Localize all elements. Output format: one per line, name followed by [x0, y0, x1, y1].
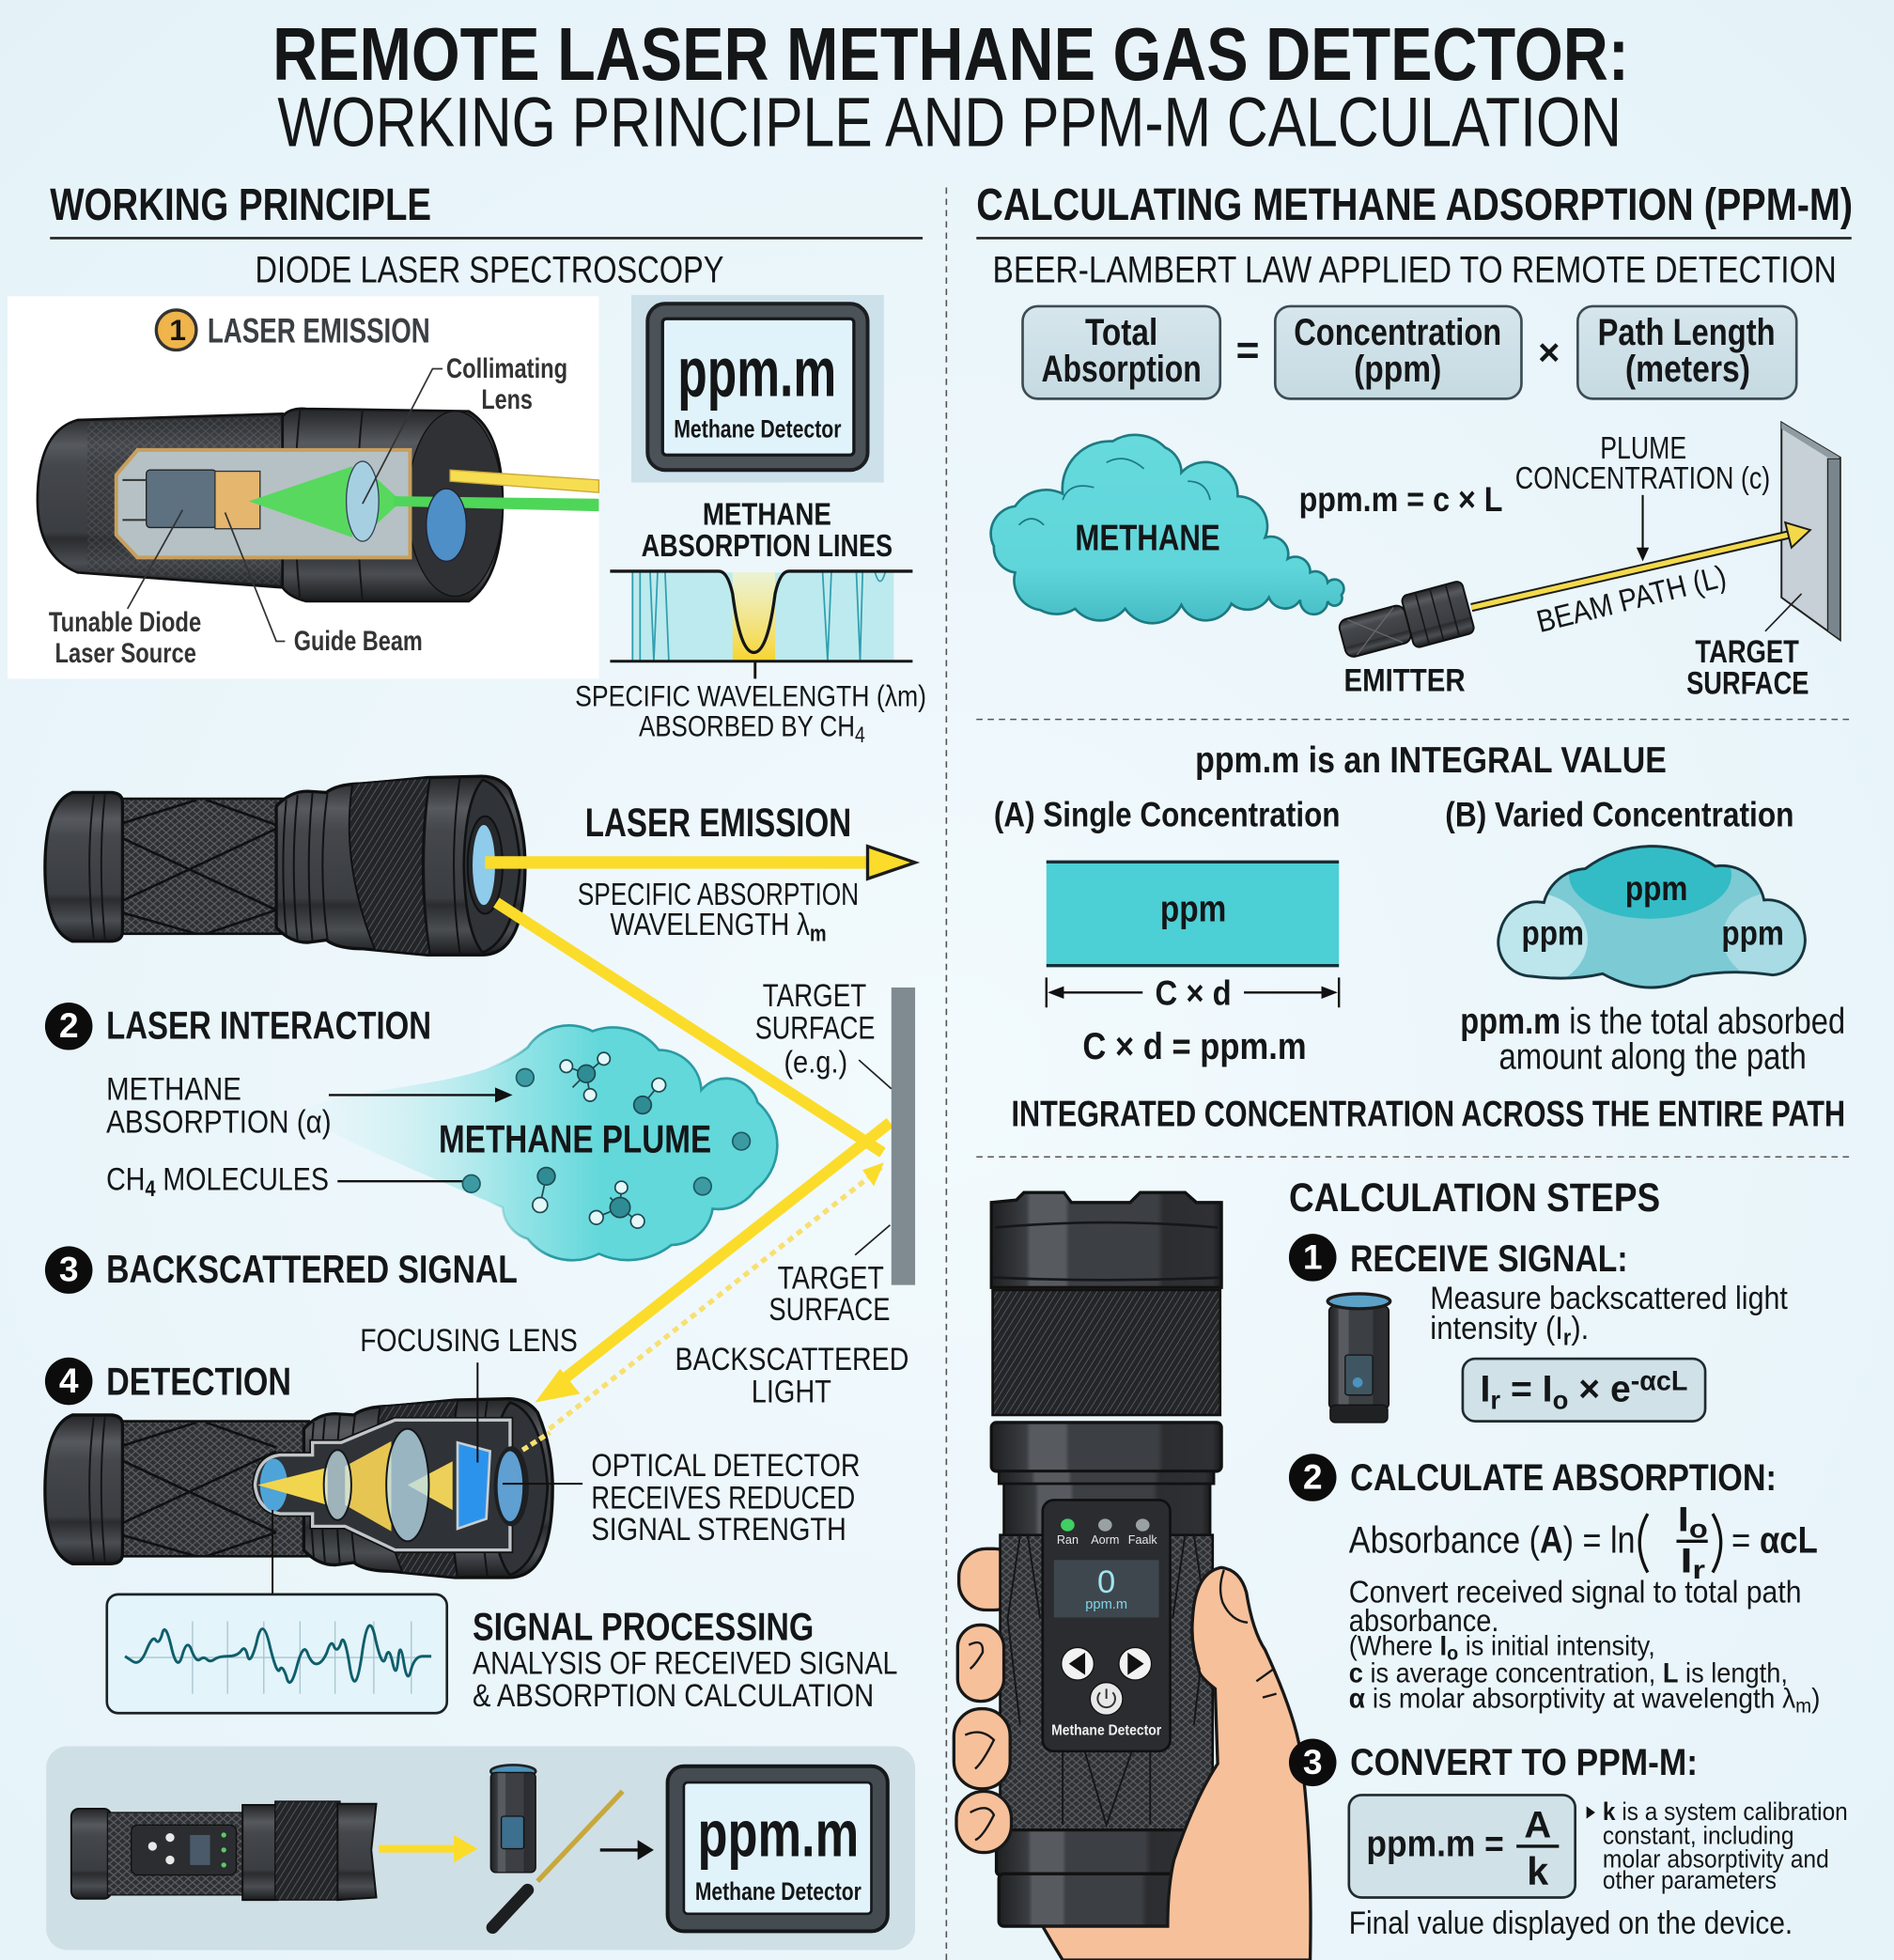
step 1: receive signal — [1289, 1234, 1788, 1423]
step 4: detection: 4 — [59, 1361, 79, 1400]
label: CH4 molecules: 4 — [145, 1176, 156, 1202]
panel: single concentration — [994, 794, 1341, 1067]
box: total absorption: Absorption — [1041, 349, 1202, 390]
step 3: convert to ppm-m: 3 — [1303, 1742, 1323, 1781]
heading: working principle: WORKING PRINCIPLE — [50, 180, 431, 230]
formula: o — [1689, 1514, 1708, 1543]
label: optical detector: OPTICAL DETECTOR — [591, 1448, 861, 1484]
label: laser emission: LASER EMISSION — [208, 311, 430, 350]
step 3: backscattered signal: BACKSCATTERED SIGNAL — [106, 1248, 518, 1291]
panel: ppm.m display: Methane Detector — [674, 415, 842, 443]
arrow: reflected beam — [536, 1123, 890, 1403]
icon: ppm.m display: Methane Detector — [695, 1877, 862, 1906]
formula: I — [1678, 1500, 1687, 1539]
step 2: laser interaction heading: 2 — [59, 1005, 79, 1045]
box: total absorption — [1023, 306, 1220, 398]
text: laser emission — [578, 801, 859, 947]
step 4: detection — [45, 1358, 291, 1405]
panel: laser emission cutaway — [8, 296, 598, 678]
text: signal processing: & ABSORPTION CALCULATION — [473, 1678, 874, 1714]
heading: working principle — [50, 180, 923, 291]
heading: integral value: ppm.m is an INTEGRAL VALUE — [1195, 740, 1667, 781]
box: total absorption: Total — [1085, 312, 1157, 353]
text: ppm.m explanation: ppm.m is the total absorbed — [1460, 1002, 1845, 1042]
formula box — [1463, 1359, 1705, 1422]
icon: flashlight emitter — [45, 776, 525, 955]
label: beam path: BEAM PATH (L) — [1533, 559, 1730, 640]
status LEDs: Faalk — [1128, 1533, 1157, 1547]
icon: step 1 badge — [156, 310, 196, 350]
panel: signal waveform — [107, 1510, 447, 1713]
panel: ppm.m display — [631, 295, 884, 483]
label: plume concentration: CONCENTRATION (c) — [1515, 461, 1770, 496]
step 1: receive signal: Measure backscattered light — [1430, 1281, 1788, 1316]
step 1: receive signal: RECEIVE SIGNAL: — [1350, 1238, 1628, 1280]
panel: single concentration: (A) Single Concentration — [994, 794, 1341, 833]
equation: total absorption: × — [1538, 332, 1560, 373]
step 1: receive signal: intensity (I — [1430, 1311, 1578, 1346]
icon: target surface slab — [1781, 423, 1840, 640]
label: backscattered light: LIGHT — [752, 1375, 831, 1410]
panel: output summary — [46, 1747, 915, 1950]
note: k constant — [1587, 1797, 1848, 1894]
arrow: beam to target — [496, 903, 882, 1153]
label: optical detector: SIGNAL STRENGTH — [591, 1512, 846, 1548]
status LEDs: Ran — [1057, 1533, 1079, 1547]
illustration: hand holding detector — [954, 1192, 1311, 1960]
step 2: calculate absorption: m — [1795, 1695, 1811, 1718]
text: ppm.m explanation: amount along the path — [1499, 1036, 1807, 1077]
panel: single concentration: C × d = ppm.m — [1082, 1026, 1307, 1067]
icon: methane plume — [294, 1025, 777, 1260]
box: path length — [1577, 306, 1796, 398]
formula box: × e — [1568, 1368, 1631, 1409]
formula box: = I — [1500, 1368, 1553, 1409]
label: target surface bottom: SURFACE — [768, 1292, 890, 1328]
label: target surface: SURFACE — [1686, 665, 1809, 701]
icon: methane cloud — [991, 435, 1343, 623]
panel: single concentration: C × d — [1156, 973, 1232, 1013]
screen: ppm.m — [1085, 1597, 1127, 1612]
label: target surface bottom — [768, 1225, 890, 1328]
formula: r — [1692, 1555, 1705, 1584]
chart: methane absorption lines: METHANE — [703, 498, 831, 533]
text: laser emission: SPECIFIC ABSORPTION — [578, 878, 859, 912]
icon: mini device — [1327, 1294, 1390, 1423]
formula — [1349, 1500, 1818, 1584]
box: concentration — [1275, 306, 1521, 398]
step 1: receive signal: ). — [1571, 1311, 1589, 1346]
step 3: backscattered signal: 3 — [59, 1250, 79, 1289]
panel: control panel — [1043, 1500, 1171, 1751]
arrow: beam path — [1471, 522, 1810, 608]
note: k constant: molar absorptivity and — [1603, 1845, 1829, 1874]
box: path length: (meters) — [1625, 349, 1750, 390]
panel: single concentration: ppm — [1160, 888, 1226, 929]
label: tunable diode: Tunable Diode — [49, 608, 201, 638]
label: target surface top: SURFACE — [755, 1011, 875, 1047]
text: signal processing: SIGNAL PROCESSING — [473, 1605, 814, 1648]
note: k constant: other parameters — [1603, 1866, 1777, 1894]
label: focusing lens: FOCUSING LENS — [360, 1323, 578, 1359]
heading: calculation steps: CALCULATION STEPS — [1289, 1175, 1660, 1221]
label: CH4 molecules: CH — [106, 1162, 153, 1197]
label: specific wavelength: SPECIFIC WAVELENGTH (λm) — [575, 679, 926, 713]
label: optical detector: RECEIVES REDUCED — [591, 1481, 855, 1517]
arrow: to display — [600, 1840, 654, 1860]
text: laser emission: m — [810, 922, 827, 947]
box: concentration: Concentration — [1294, 312, 1501, 353]
step 2: calculate absorption: c is average concentration, L is length, — [1349, 1659, 1788, 1689]
step 2: calculate absorption: α is molar absorptivity at wavelength λ — [1349, 1684, 1814, 1714]
formula box: -αcL — [1631, 1366, 1687, 1396]
panel: varied concentration: ppm — [1521, 913, 1584, 953]
icon: detector cutaway flashlight — [45, 1399, 552, 1578]
label: specific wavelength: 4 — [855, 723, 865, 748]
icon: methane plume: METHANE PLUME — [439, 1118, 711, 1161]
step 2: calculate absorption: 2 — [1303, 1456, 1323, 1496]
arrow: backscattered dotted — [522, 1162, 884, 1450]
buttons — [1062, 1647, 1152, 1715]
label: guide beam — [225, 512, 423, 657]
icon: fingers — [954, 1625, 1012, 1853]
step 2: calculate absorption: (Where I — [1349, 1631, 1448, 1661]
label: CH4 molecules — [106, 1162, 480, 1202]
chart: methane absorption lines: ABSORPTION LINES — [642, 529, 893, 564]
step 3: convert to ppm-m: CONVERT TO PPM-M: — [1350, 1742, 1698, 1783]
step 3: convert to ppm-m: Final value displayed on the device. — [1349, 1906, 1793, 1941]
icon: detector body — [991, 1192, 1221, 1926]
step 1: receive signal: 1 — [1303, 1237, 1323, 1276]
label: plume concentration — [1515, 431, 1770, 561]
formula box: I — [1481, 1368, 1491, 1409]
step 2: calculate absorption: Convert received signal to total path — [1349, 1576, 1802, 1610]
chart: methane absorption lines — [610, 498, 912, 678]
text: ppm.m explanation — [1460, 1002, 1845, 1077]
box: path length: Path Length — [1598, 312, 1776, 353]
step 2: calculate absorption: ) — [1811, 1684, 1820, 1714]
icon: ppm.m display: ppm.m — [698, 1797, 859, 1871]
formula box: k — [1527, 1850, 1548, 1893]
text: signal processing — [473, 1605, 897, 1714]
box: concentration: (ppm) — [1354, 349, 1441, 390]
icon: emitter — [1336, 581, 1475, 666]
label: tunable diode: Laser Source — [55, 639, 196, 669]
label: plume concentration: PLUME — [1600, 431, 1686, 466]
label: optical detector — [503, 1448, 861, 1548]
icon: palm and thumb — [1043, 1567, 1311, 1960]
label: methane absorption — [106, 1072, 513, 1140]
panel: ppm.m display: ppm.m — [677, 334, 836, 412]
molecules — [517, 1052, 750, 1228]
label: collimating lens: Lens — [481, 385, 533, 415]
step 2: calculate absorption: o — [1447, 1642, 1458, 1665]
target surface bar — [892, 988, 915, 1285]
formula: I — [1680, 1541, 1690, 1580]
label: target surface: TARGET — [1695, 634, 1799, 670]
icon: ppm.m display — [668, 1766, 888, 1931]
panel: varied concentration: ppm — [1721, 913, 1784, 953]
equation: total absorption — [1023, 306, 1796, 398]
label: collimating lens: Collimating — [446, 354, 567, 384]
label: methane absorption: METHANE — [106, 1072, 241, 1108]
label: backscattered light — [675, 1342, 908, 1410]
step 2: laser interaction heading — [45, 1003, 431, 1050]
cutaway flashlight — [38, 409, 598, 601]
label: collimating lens — [363, 354, 567, 504]
formula box — [1349, 1795, 1576, 1897]
formula box: r — [1490, 1385, 1500, 1414]
icon: first finger — [959, 1548, 1021, 1610]
label: methane absorption: ABSORPTION (α) — [106, 1104, 332, 1140]
heading: working principle: DIODE LASER SPECTROSCOPY — [255, 250, 723, 291]
label: guide beam: Guide Beam — [294, 627, 423, 657]
formula box: ppm.m = — [1366, 1824, 1504, 1865]
formula box: A — [1524, 1805, 1551, 1846]
title: REMOTE LASER METHANE GAS DETECTOR: — [272, 12, 1629, 96]
step 3: convert to ppm-m — [1289, 1739, 1848, 1941]
step 2: laser interaction heading: LASER INTERACTION — [106, 1004, 431, 1048]
formula: = αcL — [1731, 1519, 1818, 1561]
icon: methane cloud: METHANE — [1075, 518, 1220, 558]
screen: 0 — [1097, 1564, 1115, 1600]
icon: handheld device — [71, 1801, 377, 1900]
label: target surface top: TARGET — [763, 978, 866, 1014]
label: target surface bottom: TARGET — [778, 1261, 884, 1297]
note: k constant: k is a system calibration — [1603, 1797, 1848, 1826]
label: target surface top — [755, 978, 892, 1089]
equation: total absorption: = — [1236, 328, 1259, 373]
note: k constant: constant, including — [1603, 1821, 1794, 1849]
formula: Absorbance (A) = ln — [1349, 1519, 1636, 1561]
text: laser emission: LASER EMISSION — [585, 801, 851, 846]
text: signal processing: ANALYSIS OF RECEIVED SIGNAL — [473, 1645, 897, 1681]
panel: varied concentration — [1447, 801, 1807, 988]
icon: small detector — [490, 1765, 536, 1873]
text: laser emission: WAVELENGTH λ — [610, 908, 849, 942]
panel: varied concentration: ppm — [1625, 868, 1687, 908]
label: specific wavelength: ABSORBED BY CH — [639, 709, 905, 743]
icon: step 1 badge: 1 — [169, 313, 186, 347]
label: tunable diode — [49, 510, 201, 669]
status LEDs: Aorm — [1091, 1533, 1119, 1547]
label: target surface top: (e.g.) — [784, 1045, 847, 1080]
arrow: to receiver — [379, 1835, 477, 1862]
step 2: calculate absorption: is initial intensity, — [1458, 1631, 1655, 1661]
label: emitter: EMITTER — [1343, 663, 1466, 699]
label: CH4 molecules: MOLECULES — [155, 1162, 329, 1197]
label: backscattered light: BACKSCATTERED — [675, 1342, 908, 1377]
arrow: outgoing laser beam — [485, 847, 915, 879]
formula box: o — [1553, 1385, 1568, 1414]
step 3: backscattered signal — [45, 1246, 518, 1294]
panel: control panel: Methane Detector — [1051, 1723, 1161, 1739]
label: specific wavelength — [575, 679, 926, 748]
title: WORKING PRINCIPLE AND PPM-M CALCULATION — [277, 84, 1622, 162]
heading: calculating methane adsorption — [976, 180, 1853, 291]
step 2: calculate absorption: absorbance. — [1349, 1604, 1499, 1639]
label: target surface — [1686, 594, 1809, 701]
title — [272, 12, 1629, 162]
status LEDs — [1057, 1518, 1157, 1547]
formula: ppm.m = c x L: ppm.m = c × L — [1299, 479, 1502, 519]
screen — [1054, 1560, 1159, 1617]
step 2: calculate absorption — [1289, 1454, 1820, 1718]
step 2: calculate absorption: CALCULATE ABSORPTION: — [1350, 1457, 1777, 1499]
step 4: detection: DETECTION — [106, 1361, 291, 1404]
panel: varied concentration: (B) Varied Concentration — [1445, 794, 1794, 833]
icon: wand — [492, 1791, 623, 1927]
step 1: receive signal: r — [1563, 1325, 1571, 1350]
